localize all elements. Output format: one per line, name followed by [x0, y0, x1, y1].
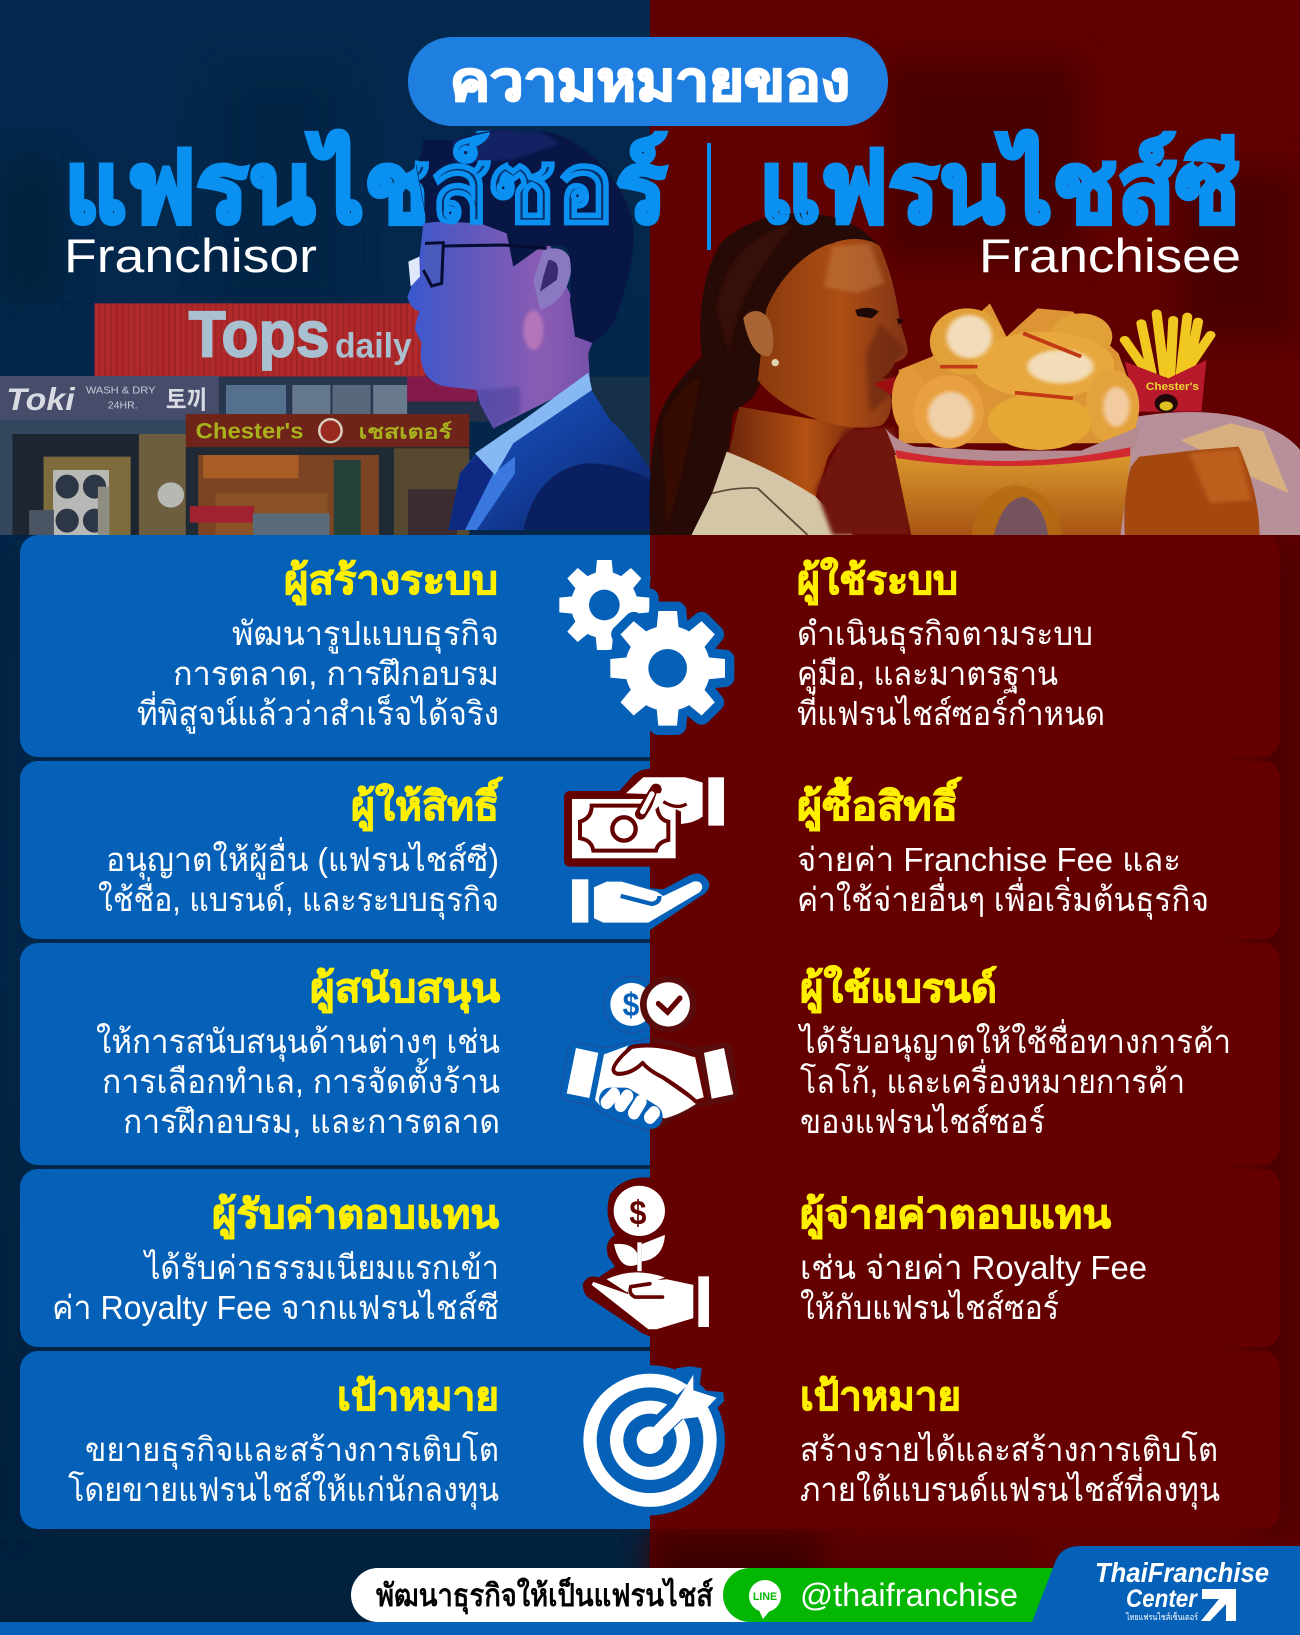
blurred background chicken — [816, 427, 911, 535]
panel: row 1 right: ผู้ใช้ระบบ — [797, 557, 958, 605]
panel: row 3 left: ให้การสนับสนุนด้านต่างๆ เช่น — [96, 1023, 500, 1062]
icon: gears — [559, 560, 725, 726]
chicken — [892, 303, 1139, 450]
storefront: Tops daily — [95, 298, 650, 470]
panel: row 4 right — [650, 1169, 1280, 1347]
panel: row 5 left: เป้าหมาย — [337, 1375, 499, 1419]
ear — [533, 248, 572, 310]
panel: row 1 left: ที่พิสูจน์แล้วว่าสำเร็จได้จริง — [137, 691, 499, 734]
icon: handshake with coins — [560, 976, 739, 1131]
icon: LINE — [749, 1580, 781, 1619]
panel: row 4 left — [20, 1169, 650, 1347]
storefront: Toki wash and dry: Toki — [6, 382, 76, 417]
fries — [1125, 313, 1211, 413]
icon: money plant in hand: $ — [629, 1194, 646, 1232]
subheading: Franchisor: Franchisor — [64, 229, 317, 282]
panel: row 5 right: สร้างรายได้และสร้างการเติบโต — [800, 1431, 1218, 1468]
panel: row 4 right: ผู้จ่ายค่าตอบแทน — [800, 1193, 1111, 1239]
storefront: Toki wash and dry: 24HR. — [108, 400, 138, 411]
photo: fried chicken bucket, fries and plate — [816, 303, 1300, 535]
coleslaw and grilled chicken — [1181, 423, 1288, 493]
panel: row 5 right: ภายใต้แบรนด์แฟรนไชส์ที่ลงทุน — [800, 1467, 1220, 1510]
footer: ThaiFranchise Center logo: ไทยแฟรนไชส์เซ็นเตอร์ — [1125, 1610, 1198, 1622]
panel: row 2 left — [20, 761, 650, 939]
panel: row 2 left: ผู้ให้สิทธิ์ — [351, 777, 503, 831]
heading outline overlays on photo: แฟรนไชส์ซอร์ — [64, 131, 667, 244]
panel: row 1 left: พัฒนารูปแบบธุรกิจ — [232, 615, 499, 654]
heading: แฟรนไชส์ซอร์: แฟรนไชส์ซอร์ — [64, 131, 667, 244]
panel: row 2 left: อนุญาตให้ผู้อื่น (แฟรนไชส์ซี) — [106, 837, 499, 880]
panel: row 2 right: ผู้ซื้อสิทธิ์ — [797, 777, 963, 831]
plate — [1118, 412, 1300, 535]
panel: row 2 right: จ่ายค่า Franchise Fee และ — [797, 841, 1181, 878]
storefront: Chester's — [186, 414, 469, 535]
title pill — [408, 37, 888, 126]
photo: man in suit — [407, 130, 652, 530]
icon: handshake with coins: $ — [623, 985, 640, 1023]
panel: row 1 left — [20, 535, 650, 757]
icon: money exchange between hands — [564, 769, 724, 930]
panel: row 3 right: โลโก้, และเครื่องหมายการค้า — [800, 1059, 1185, 1100]
subheading: Franchisee: Franchisee — [979, 229, 1241, 282]
panel: row 2 right: ค่าใช้จ่ายอื่นๆ เพื่อเริ่มต้นธุรกิจ — [797, 877, 1209, 920]
panel: row 1 left: ผู้สร้างระบบ — [284, 559, 498, 605]
panel: row 5 right — [650, 1351, 1280, 1529]
glasses — [424, 244, 441, 283]
collar — [475, 373, 592, 475]
footer: green LINE pill: @thaifranchise — [800, 1577, 1018, 1613]
footer: ThaiFranchise Center logo: Center — [1126, 1585, 1198, 1613]
footer: ThaiFranchise Center logo — [1032, 1546, 1300, 1622]
storefront: Toki wash and dry: WASH & DRY — [86, 385, 156, 396]
fries: Chester's — [1146, 380, 1199, 393]
storefront: Tops daily: Tops — [189, 298, 330, 371]
icon: logo arrow — [1201, 1589, 1236, 1621]
neck — [729, 407, 857, 535]
panel: row 4 right: เช่น จ่ายค่า Royalty Fee — [800, 1249, 1147, 1286]
storefront: Toki wash and dry: 토끼 — [166, 385, 207, 414]
panel: row 4 left: ได้รับค่าธรรมเนียมแรกเข้า — [142, 1249, 499, 1286]
ear — [743, 311, 773, 356]
storefront: Chester's: Chester's — [196, 420, 303, 444]
photo: woman in profile — [649, 213, 908, 535]
neck and face — [407, 217, 593, 428]
panel: row 3 left: การฝึกอบรม, และการตลาด — [123, 1103, 500, 1140]
panel: row 3 right: ได้รับอนุญาตให้ใช้ชื่อทางการค้า — [797, 1019, 1231, 1062]
icon: target with arrow — [575, 1365, 725, 1515]
icon: LINE: LINE — [753, 1591, 777, 1603]
footer: white tagline pill: พัฒนาธุรกิจให้เป็นแฟรนไชส์ — [376, 1576, 713, 1615]
panel: row 3 left: ผู้สนับสนุน — [310, 967, 500, 1014]
jacket — [691, 452, 853, 535]
photo: franchise storefronts — [0, 298, 650, 535]
hair and ponytail — [649, 213, 879, 535]
panel: row 1 right: ที่แฟรนไชส์ซอร์กำหนด — [797, 691, 1105, 732]
panel: row 5 left — [20, 1351, 650, 1529]
footer: ThaiFranchise Center logo: ThaiFranchise — [1095, 1557, 1269, 1588]
panel: row 1 left: การตลาด, การฝึกอบรม — [173, 655, 499, 692]
panel: row 5 right: เป้าหมาย — [800, 1375, 961, 1419]
storefront: Tops daily: daily — [335, 326, 412, 365]
footer strip — [0, 1546, 1300, 1635]
panel: row 2 right — [650, 761, 1280, 939]
storefront: Chester's: เชสเตอร์ — [359, 421, 452, 443]
heading outline overlays on photo — [416, 132, 850, 226]
panel: row 5 left: โดยขายแฟรนไชส์ให้แก่นักลงทุน — [68, 1471, 499, 1510]
panel: row 5 left: ขยายธุรกิจและสร้างการเติบโต — [85, 1431, 499, 1470]
panel: row 3 right: ของแฟรนไชส์ซอร์ — [800, 1103, 1045, 1140]
panel: row 4 left: ผู้รับค่าตอบแทน — [212, 1193, 499, 1239]
footer: green LINE pill — [723, 1568, 1062, 1622]
heading outline overlays on photo: แฟรนไชส์ซี — [759, 131, 1240, 244]
panel: row 1 right: ดำเนินธุรกิจตามระบบ — [797, 615, 1093, 654]
hair — [416, 130, 634, 343]
eye and lips — [855, 308, 904, 325]
icon: money plant in hand — [583, 1177, 709, 1337]
heading: แฟรนไชส์ซี: แฟรนไชส์ซี — [759, 131, 1240, 244]
earring — [771, 359, 779, 366]
panel: row 4 right: ให้กับแฟรนไชส์ซอร์ — [800, 1289, 1059, 1326]
background: right red half — [650, 0, 1300, 1635]
panel: row 4 left: ค่า Royalty Fee จากแฟรนไชส์ซี — [52, 1289, 499, 1326]
face — [758, 239, 908, 428]
panel: row 3 right — [650, 943, 1280, 1165]
panel: row 3 left — [20, 943, 650, 1165]
panel: row 3 right: ผู้ใช้แบรนด์ — [800, 965, 997, 1013]
title pill: ความหมายของ — [450, 52, 850, 112]
panel: row 1 right: คู่มือ, และมาตรฐาน — [797, 655, 1058, 694]
bucket rim — [885, 427, 1139, 464]
suit — [448, 390, 652, 530]
divider between headings — [707, 143, 711, 250]
background: left navy half — [0, 0, 650, 1635]
panel: row 2 left: ใช้ชื่อ, แบรนด์, และระบบธุรกิจ — [98, 877, 499, 920]
panel: row 3 left: การเลือกทำเล, การจัดตั้งร้าน — [102, 1058, 500, 1100]
bucket — [895, 455, 1131, 535]
storefront: Toki wash and dry — [0, 376, 219, 535]
footer: white tagline pill — [351, 1568, 760, 1622]
panel: row 1 right — [650, 535, 1280, 757]
